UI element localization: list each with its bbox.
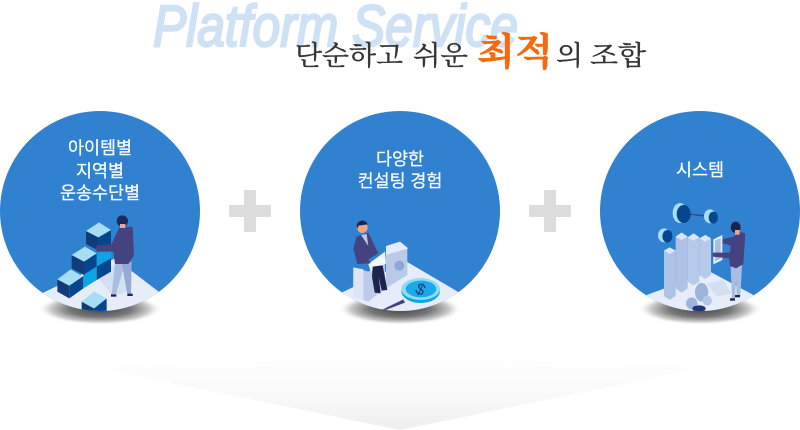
text: panel 1 label: 아이템별 — [68, 138, 132, 158]
panel: item region transport — [0, 111, 200, 333]
shadow: panel 1 — [38, 293, 162, 325]
shadow: panel 3 — [638, 293, 762, 325]
text: panel 1 label: 운송수단별 — [60, 183, 140, 203]
heading: simple and easy optimal combination: 단순하고 — [295, 41, 403, 71]
panel: diverse consulting experience — [300, 111, 500, 333]
panel: system — [600, 111, 800, 333]
illustration: person stacking cubes — [43, 215, 159, 311]
illustration: consultant on money with magnifier: $ — [413, 280, 428, 300]
text: panel 2 label — [358, 149, 442, 191]
heading: simple and easy optimal combination: 조합 — [590, 41, 646, 71]
illustration: consultant on money with magnifier — [342, 220, 458, 311]
text: panel 2 label: 다양한 — [376, 149, 424, 169]
heading: simple and easy optimal combination: 쉬운 — [413, 41, 468, 71]
text: panel 1 label — [60, 138, 140, 203]
circle: panel 3 — [600, 111, 800, 311]
heading: simple and easy optimal combination — [295, 32, 646, 74]
circle: panel 2 — [300, 111, 500, 311]
text: panel 3 label: 시스템 — [676, 160, 724, 180]
text: panel 1 label: 지역별 — [76, 161, 124, 181]
icon: plus 2 — [529, 190, 571, 232]
arrow: downward gradient — [100, 355, 700, 430]
illustration: person with data columns — [646, 203, 754, 311]
icon: plus 1 — [229, 190, 271, 232]
shadow: panel 2 — [338, 293, 462, 325]
text: panel 2 label: 컨설팅 경험 — [358, 171, 442, 191]
heading: simple and easy optimal combination: 의 — [556, 41, 583, 71]
heading: simple and easy optimal combination: 최적 — [477, 32, 553, 74]
circle: panel 1 — [0, 111, 200, 311]
